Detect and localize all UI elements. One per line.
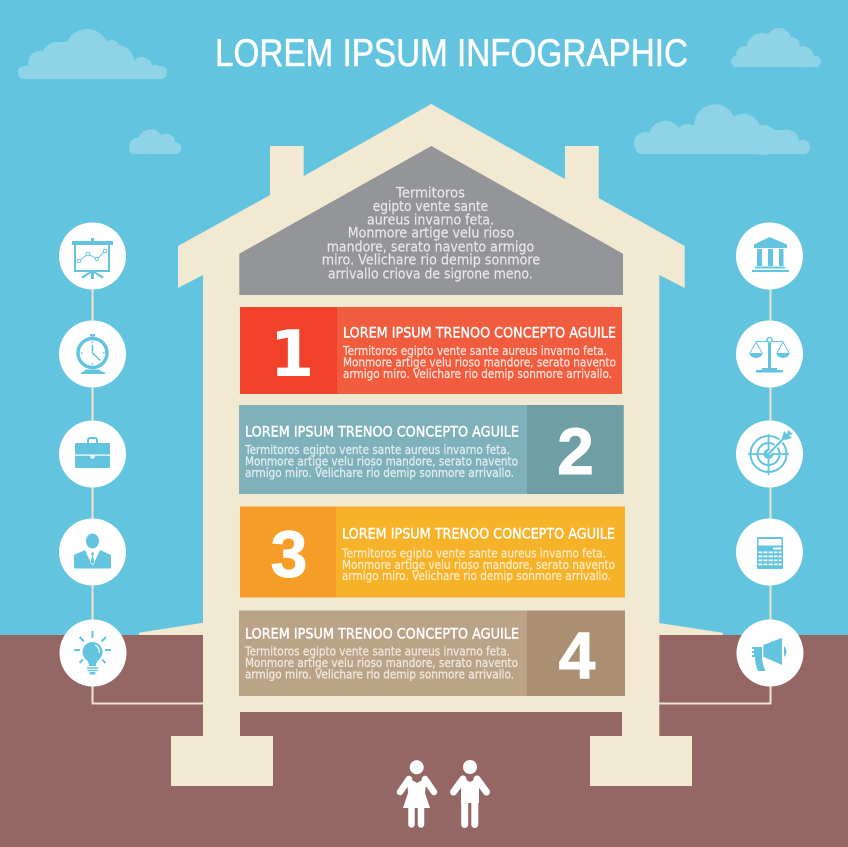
- panel 3: Monmore artige velu rioso mandore, serato navento: [342, 557, 615, 572]
- roof text: aureus invarno feta.: [367, 212, 494, 228]
- roof text: egipto vente sante: [373, 199, 488, 215]
- panel 2: Monmore artige velu rioso mandore, serato navento: [245, 454, 518, 468]
- panel 1: armigo miro. Velichare rio demip sonmore arrivallo.: [343, 366, 612, 381]
- connector lines: [92, 256, 770, 704]
- panel 1: LOREM IPSUM TRENOO CONCEPTO AGUILE: [343, 326, 616, 342]
- cloud: top right: [731, 28, 821, 67]
- house: [139, 104, 723, 786]
- icon: clock: [59, 320, 126, 388]
- icon: light bulb: [60, 620, 126, 686]
- title: LOREM IPSUM INFOGRAPHIC: [215, 32, 688, 75]
- roof text: [322, 186, 540, 282]
- panel 2: 2: [557, 414, 594, 488]
- panel 3: Termitoros egipto vente sante aureus invarno feta.: [341, 546, 606, 560]
- panel 1: Monmore artige velu rioso mandore, serato navento: [343, 354, 616, 370]
- icon: woman and man: [400, 760, 486, 824]
- panel 4: Monmore artige velu rioso mandore, serato navento: [245, 655, 518, 670]
- icon: target: [736, 420, 803, 488]
- roof panel: [239, 146, 623, 295]
- icon: bank: [736, 222, 803, 290]
- cloud: small left: [129, 129, 181, 154]
- roof text: miro. Velichare rio demip sonmore: [322, 252, 540, 268]
- panel 1: Termitoros egipto vente sante aureus invarno feta.: [342, 343, 607, 358]
- panel 3: 3: [271, 517, 307, 591]
- cloud: top left: [18, 29, 167, 79]
- panel 3: [240, 506, 625, 598]
- panel 4: LOREM IPSUM TRENOO CONCEPTO AGUILE: [245, 626, 519, 642]
- panel 2: Termitoros egipto vente sante aureus invarno feta.: [244, 442, 510, 457]
- panel 3: armigo miro. Velichare rio demip sonmore arrivallo.: [342, 568, 611, 583]
- icon: businessman: [59, 518, 126, 586]
- icon: scales: [736, 320, 803, 388]
- cloud: large right: [634, 104, 810, 155]
- roof text: Monmore artige velu rioso: [348, 226, 514, 242]
- panel 2: [239, 405, 624, 494]
- roof text: mandore, serato navento armigo: [327, 240, 534, 256]
- panel 1: [240, 307, 622, 394]
- icon: megaphone: [736, 620, 804, 686]
- panel 4: armigo miro. Velichare rio demip sonmore arrivallo.: [245, 666, 514, 682]
- roof text: Termitoros: [395, 186, 465, 202]
- panel 4: [239, 610, 625, 696]
- roof text: arrivallo criova de sigrone meno.: [328, 266, 533, 282]
- panel 4: Termitoros egipto vente sante aureus invarno feta.: [244, 644, 510, 658]
- panel 4: 4: [559, 618, 596, 692]
- panel 1: 1: [270, 318, 314, 392]
- panel 3: LOREM IPSUM TRENOO CONCEPTO AGUILE: [342, 526, 615, 542]
- panel 2: armigo miro. Velichare rio demip sonmore arrivallo.: [245, 465, 514, 480]
- panel 2: LOREM IPSUM TRENOO CONCEPTO AGUILE: [245, 424, 519, 440]
- icon: briefcase: [59, 420, 126, 488]
- icon: calculator: [736, 518, 803, 586]
- icon: presentation board: [59, 222, 126, 290]
